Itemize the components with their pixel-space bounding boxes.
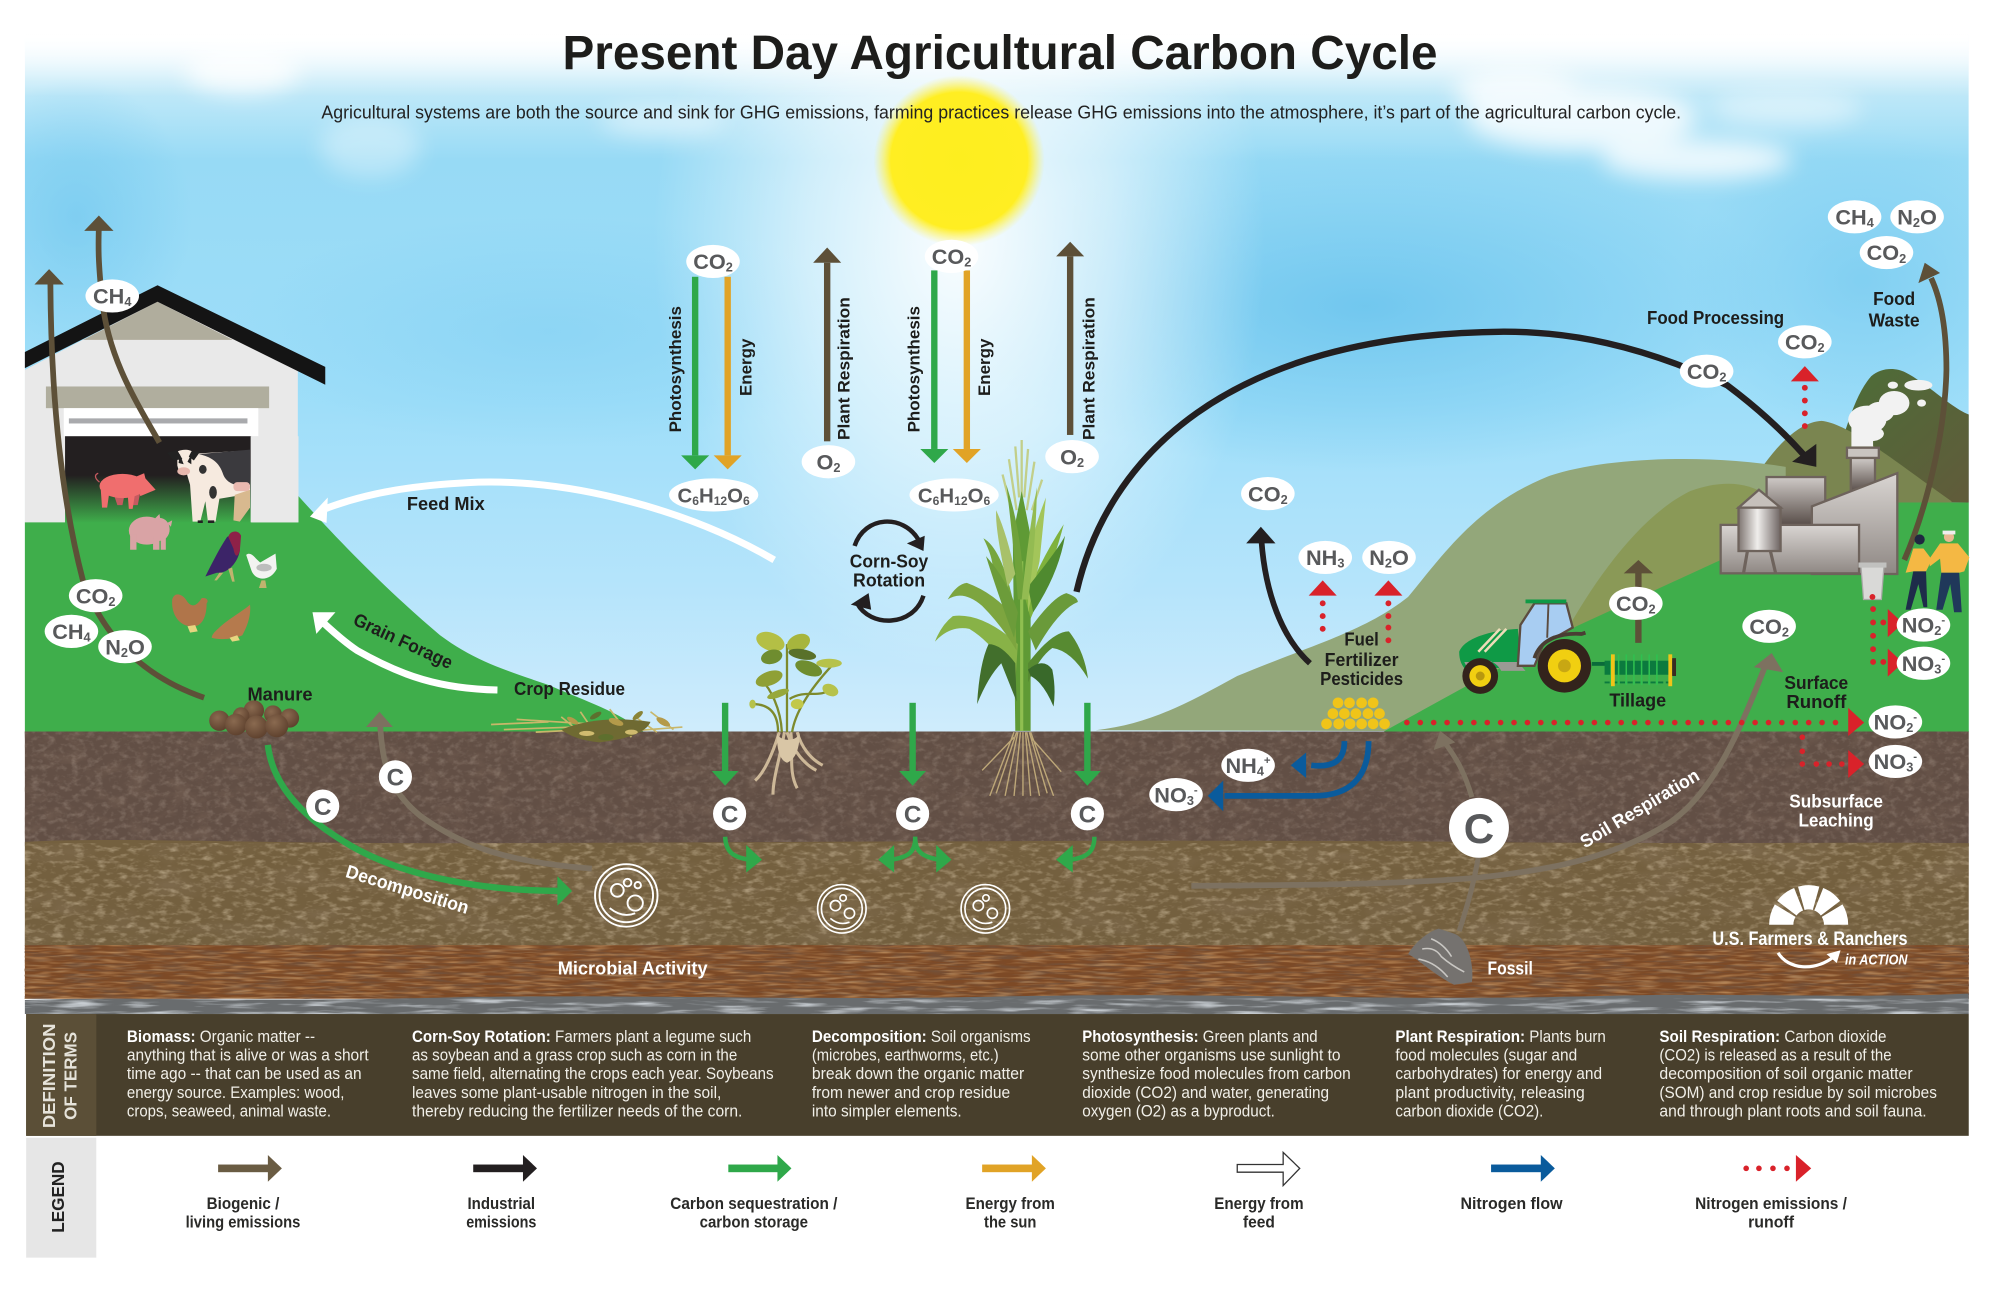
bubble: N2O waste: N: [1897, 204, 1913, 229]
bubble: O2 right: [1045, 440, 1099, 473]
bubble: NH4: +: [1264, 755, 1271, 767]
bubble: glucose left: H: [699, 486, 714, 508]
legend: industrial: [466, 1155, 537, 1232]
definition: photosynthesis: Photosynthesis: Green plants and: [1082, 1027, 1318, 1046]
icon: microbe large: [595, 864, 658, 927]
definition: soil respiration: (CO2) is released as a result of the: [1659, 1046, 1892, 1065]
arrow: nitrogen emissions N2O: [1374, 580, 1402, 643]
definition: photosynthesis: dioxide (CO2) and water, generating: [1082, 1083, 1329, 1102]
label: tillage: Tillage: [1609, 690, 1666, 711]
legend: carbon sequestration: [670, 1155, 838, 1232]
bubble: CO2 middle: 2: [964, 255, 971, 270]
bubble: O2 left: O: [816, 449, 833, 474]
label: food waste: [1869, 288, 1920, 331]
bubble: glucose left: 12: [714, 494, 727, 508]
arrows: small carbon curves: [725, 837, 1094, 872]
bubble: carbon manure: C: [314, 794, 331, 821]
definition: photosynthesis: synthesize food molecules from carbon: [1082, 1064, 1351, 1083]
hill: darkest back: [1824, 369, 1969, 503]
bubble: CO2 tillage: CO: [1616, 591, 1649, 616]
legend: nitrogen flow: Nitrogen flow: [1460, 1194, 1563, 1213]
label: subsurface leaching: Leaching: [1798, 810, 1874, 831]
panel: green field right: [1383, 503, 1969, 732]
heading block: OF TERMS: [61, 1032, 81, 1120]
definition: decomposition: [812, 1027, 1031, 1121]
bubble: NH4: [1221, 749, 1275, 782]
bubble: NO3 waste: NO: [1902, 651, 1934, 676]
definition: plant respiration: carbohydrates) for energy and: [1395, 1064, 1602, 1083]
arrows: photosynthesis and energy set one: Photosynthesis: [666, 306, 685, 432]
label: fuel fertilizer pesticides: Fuel: [1344, 628, 1379, 649]
bubble: glucose middle: O: [968, 486, 983, 508]
bubble: NO3 leaching: [1869, 745, 1922, 778]
icon: tiller: [1592, 654, 1676, 686]
bubble: NO3 leaching: NO: [1874, 749, 1906, 774]
label: food processing: Food Processing: [1647, 307, 1784, 328]
panel: right hills: [1096, 369, 1969, 732]
logo swoosh: [1778, 950, 1841, 967]
bubble: NO2 waste: [1897, 608, 1950, 642]
legend: industrial: Industrial: [467, 1194, 535, 1213]
bubble: CO2 fuel: 2: [1281, 492, 1288, 507]
icon: microbe middle: [818, 885, 866, 933]
bubble: carbon middle: [896, 797, 929, 830]
bubble: NO3 soil: -: [1194, 784, 1198, 796]
bubble: CO2 waste: [1860, 236, 1913, 269]
bubble: N2O manure: N: [105, 634, 121, 659]
logo wordmark: U.S. Farmers & Ranchers: [1712, 928, 1908, 950]
heading block: [26, 1014, 96, 1136]
definition: biomass: anything that is alive or was a short: [127, 1046, 369, 1065]
bubble: O2 left: 2: [833, 460, 840, 475]
bubble: O2 right: O: [1060, 444, 1077, 469]
definition: corn-soy rotation: same field, alternating the crops each year. Soybeans: [412, 1064, 774, 1083]
soil: topsoil: [25, 732, 1969, 846]
bubble: glucose left: 6: [692, 494, 699, 508]
door opening: [65, 436, 251, 523]
logo fan: [1781, 897, 1836, 925]
bubble: O2 left: [802, 445, 855, 478]
definition: decomposition: break down the organic matter: [812, 1064, 1025, 1083]
bubble: O2 right: 2: [1077, 455, 1084, 470]
bubble: CO2 fuel: [1241, 477, 1295, 510]
title: Present Day Agricultural Carbon Cycle: [563, 26, 1437, 80]
bubble: CO2 manure: CO: [76, 583, 108, 608]
icon: pink pig: [129, 514, 172, 550]
bubble: NO3 soil: [1149, 778, 1203, 811]
arrows: photosynthesis and energy set one: [666, 277, 755, 469]
panel: definition of terms: [26, 1014, 1969, 1136]
bubble: CH4 barn: [85, 279, 139, 312]
bubble: CO2 middle: [925, 240, 978, 273]
label: subsurface leaching: Subsurface: [1789, 790, 1883, 811]
label: feed mix: Feed Mix: [407, 493, 485, 514]
icon: trash can: [1858, 562, 1886, 600]
bubble: carbon large: C: [1464, 805, 1494, 852]
barn wall: [25, 301, 298, 523]
barn pillar: [251, 436, 298, 522]
legend: nitrogen flow: [1460, 1155, 1563, 1213]
bubble: CH4 barn: CH: [93, 284, 124, 309]
chimney: [1851, 458, 1875, 494]
panel: barn: [25, 285, 325, 523]
bubble: CO2 tillage: [1609, 587, 1663, 620]
bubble: glucose left: [669, 478, 758, 511]
definition: decomposition: (microbes, earthworms, etc.): [812, 1046, 999, 1065]
gable: [83, 302, 233, 340]
bubble: NO2 runoff: NO: [1874, 710, 1906, 735]
bubble: CO2 left: 2: [726, 260, 733, 275]
arrow: industrial arc to food processing: [1077, 332, 1816, 592]
bubble: glucose middle: 6: [933, 494, 940, 508]
bubble: glucose left: C: [677, 486, 692, 508]
bubble: CO2 processing: 2: [1818, 340, 1825, 355]
bubble: NO3 soil: 3: [1187, 793, 1194, 808]
bubble: CO2 waste: CO: [1867, 240, 1899, 265]
icon: brown hen one: [172, 594, 208, 633]
definition: corn-soy rotation: thereby reducing the fertilizer needs of the corn.: [412, 1102, 742, 1121]
definition: biomass: time ago -- that can be used as an: [127, 1064, 362, 1083]
icon: crop residue: [491, 709, 682, 742]
soil: subsoil: [25, 840, 1969, 946]
label: food waste: Food: [1873, 288, 1915, 309]
arrow: industrial from fuel: [1246, 527, 1310, 663]
bubble: NO3 leaching: 3: [1906, 760, 1913, 775]
arrow: feed mix: [310, 482, 774, 560]
bubble: NO3 soil: NO: [1154, 782, 1187, 807]
bubble: NO2 waste: NO: [1902, 613, 1934, 638]
bubble: CO2 tillage: 2: [1649, 602, 1656, 617]
arrow: grain forage: [313, 612, 497, 690]
definition: plant respiration: [1395, 1027, 1606, 1121]
bubble: N2O waste: O: [1920, 204, 1937, 229]
arrows: photosynthesis and energy set two: Energy: [975, 338, 994, 396]
bubble: carbon soy: C: [721, 802, 738, 829]
subtitle: Agricultural systems are both the source and sink for GHG emissions, farming practices release GHG emissions into the atmosphere, it’s part of the agricultural carbon cycle.: [321, 102, 1681, 123]
legend: industrial: emissions: [466, 1213, 536, 1232]
bubble: N2O fuel: O: [1392, 545, 1409, 570]
bubble: CO2 fuel: CO: [1248, 481, 1281, 506]
bubble: CO2 industrial: [1680, 355, 1733, 388]
definition: biomass: Biomass: Organic matter --: [127, 1027, 315, 1046]
legend: energy from feed: [1214, 1152, 1304, 1232]
bubble: NO2 runoff: [1869, 705, 1922, 739]
label: food waste: Waste: [1869, 310, 1920, 331]
icon: purple hen: [205, 532, 241, 582]
arrows: photosynthesis and energy set two: [905, 270, 994, 463]
bubble: CH4 manure: 4: [84, 630, 92, 645]
arrow: subsurface leaching dotted line: [1799, 734, 1864, 778]
bubble: NO2 waste: 2: [1934, 623, 1941, 638]
silo: [1739, 490, 1781, 573]
definition: plant respiration: food molecules (sugar and: [1395, 1046, 1577, 1065]
logo in action: in ACTION: [1845, 952, 1908, 968]
arrow: plant respiration two: Plant Respiration: [1079, 297, 1098, 440]
bubble: glucose middle: [909, 478, 999, 511]
legend heading: LEGEND: [48, 1161, 68, 1233]
label: corn-soy rotation: Corn-Soy: [850, 551, 929, 572]
definition: decomposition: from newer and crop residue: [812, 1083, 1010, 1102]
bubble: CO2 soil: [1742, 610, 1796, 643]
definition: corn-soy rotation: [412, 1027, 774, 1121]
definition: soil respiration: Soil Respiration: Carbon dioxide: [1659, 1027, 1886, 1046]
top white fade: [25, 39, 1968, 88]
roof: [25, 285, 325, 385]
bubble: N2O waste: [1890, 200, 1944, 233]
legend: energy from sun: Energy from: [966, 1194, 1055, 1213]
label: fuel fertilizer pesticides: Fertilizer: [1325, 649, 1399, 670]
arrow: nitrogen emissions factory: [1791, 366, 1819, 429]
label: corn-soy rotation: [850, 551, 929, 591]
bubble: carbon up: C: [387, 765, 404, 792]
panel: sky background: [0, 0, 2000, 732]
definition: biomass: crops, seaweed, animal waste.: [127, 1102, 331, 1121]
arrow: food waste emissions: [1904, 263, 1946, 560]
arrow: plant respiration one: Plant Respiration: [834, 297, 853, 440]
legend: energy from sun: [966, 1155, 1055, 1232]
legend: energy from sun: the sun: [984, 1213, 1036, 1232]
arrow: fossil carbon lines: [1434, 731, 1478, 931]
legend: energy from feed: Energy from: [1214, 1194, 1304, 1213]
arrows: photosynthesis and energy set one: Energy: [736, 338, 755, 396]
deep blue sky patches: [24, 101, 1969, 444]
legend: biogenic: living emissions: [186, 1213, 300, 1232]
bubble: CO2 industrial: 2: [1719, 369, 1726, 384]
bubble: NO3 waste: [1897, 647, 1950, 680]
definition: biomass: energy source. Examples: wood,: [127, 1083, 344, 1102]
icon: farmers and ranchers logo: [1712, 897, 1908, 968]
icon: factory smoke: [1848, 380, 1932, 446]
bubble: CH4 waste: CH: [1835, 204, 1867, 229]
legend heading: [26, 1138, 96, 1258]
main block: [1721, 525, 1859, 573]
bubble: glucose left: 6: [743, 494, 750, 508]
icon: microbe right: [961, 885, 1010, 933]
bubble: N2O fuel: 2: [1385, 556, 1392, 571]
upper block: [1767, 477, 1825, 528]
icon: cow: [167, 450, 250, 523]
bubble: NH3: 3: [1337, 556, 1344, 571]
definition: soil respiration: decomposition of soil organic matter: [1659, 1064, 1913, 1083]
bubble: NO3 leaching: -: [1913, 751, 1917, 763]
bubble: NO2 runoff: -: [1913, 712, 1917, 724]
bubbles: gas labels: [45, 200, 1950, 858]
label: soil respiration: Soil Respiration: [1576, 764, 1703, 852]
legend: nitrogen emissions: [1695, 1155, 1847, 1232]
bubble: CO2 manure: 2: [108, 594, 115, 609]
icon: tractor: [1459, 599, 1591, 694]
legend: biogenic: [186, 1155, 300, 1232]
sun glow: [676, 59, 1246, 626]
arrow: nitrogen emissions NH3: [1309, 580, 1337, 632]
arrow: biogenic emissions from manure: [34, 269, 204, 698]
icon: manure pile: [209, 700, 299, 739]
bubble: carbon manure: [306, 790, 339, 823]
saw-tooth wall: [1812, 473, 1897, 574]
bubble: CH4 waste: 4: [1867, 215, 1875, 230]
arrow: soil respiration: [1191, 653, 1783, 886]
bubble: glucose middle: C: [918, 486, 933, 508]
labels: scene text: [247, 288, 1920, 978]
bubble: carbon corn: [1071, 797, 1104, 830]
label: surface runoff: Runoff: [1786, 691, 1847, 712]
bubble: CH4 manure: [45, 615, 98, 648]
bubble: carbon up: [379, 760, 412, 793]
legend: nitrogen emissions: runoff: [1748, 1213, 1794, 1232]
bubble: CO2 waste: 2: [1899, 251, 1906, 266]
bubble: CO2 industrial: CO: [1687, 359, 1719, 384]
heading block: DEFINITION: [39, 1024, 59, 1128]
bubble: glucose middle: 12: [954, 494, 968, 508]
label: fossil: Fossil: [1488, 957, 1533, 978]
bubble: NH3: NH: [1306, 545, 1337, 570]
definition: photosynthesis: some other organisms use sunlight to: [1082, 1046, 1341, 1065]
definition: corn-soy rotation: Corn-Soy Rotation: Farmers plant a legume such: [412, 1027, 751, 1046]
definition: photosynthesis: oxygen (O2) as a byproduct.: [1082, 1102, 1275, 1121]
icon: fossil: [1408, 929, 1472, 985]
bubble: NO3 waste: -: [1941, 653, 1945, 665]
icon: corn plant: [935, 440, 1088, 796]
panel: legend: [26, 1138, 1847, 1258]
arrow: tillage emissions: [1624, 560, 1653, 643]
door lintel: [64, 408, 258, 436]
bubble: glucose left: O: [727, 486, 743, 508]
label: fuel fertilizer pesticides: Pesticides: [1320, 668, 1403, 689]
bubble: CO2 left: CO: [693, 249, 726, 274]
arrow: plant respiration one: [813, 247, 853, 441]
arrow: biogenic soil carbon up: [366, 712, 592, 869]
legend: energy from feed: feed: [1243, 1213, 1275, 1232]
panel: left green hill: [25, 496, 644, 732]
definition: soil respiration: and through plant roots and soil fauna.: [1659, 1102, 1927, 1121]
icon: corn-soy rotation arrows: [851, 522, 925, 621]
icon: fertilizer pellets: [1321, 697, 1390, 729]
panel: soil layers: [25, 732, 1969, 1014]
hill: darker olive: [1562, 484, 1786, 663]
bubble: NO2 waste: -: [1941, 615, 1945, 627]
bubble: CH4 barn: 4: [124, 294, 132, 309]
definition: decomposition: into simpler elements.: [812, 1102, 962, 1121]
icon: woman farmer: [1906, 534, 1931, 610]
definition: biomass: [127, 1027, 369, 1121]
bubble: glucose middle: H: [939, 486, 954, 508]
icon: white hen: [246, 554, 277, 588]
bubble: CH4 waste: [1828, 200, 1881, 233]
bubble: NH4: 4: [1257, 764, 1265, 779]
arrow: biogenic methane from barn: [84, 216, 159, 443]
definition: corn-soy rotation: as soybean and a grass crop such as corn in the: [412, 1046, 737, 1065]
bubble: CO2 manure: [69, 579, 122, 612]
arrow: surface runoff dotted line: [1404, 708, 1864, 736]
icon: man farmer: [1929, 531, 1969, 612]
definition: plant respiration: plant productivity, releasing: [1395, 1083, 1585, 1102]
sun: [874, 75, 1045, 246]
bubble: NO3 waste: 3: [1934, 661, 1941, 676]
label: subsurface leaching: [1789, 790, 1883, 831]
icon: red pig: [95, 473, 156, 509]
bubble: carbon corn: C: [1079, 802, 1096, 829]
bubble: NH3: [1298, 541, 1352, 574]
definition: plant respiration: carbon dioxide (CO2).: [1395, 1102, 1543, 1121]
bubble: carbon large: [1449, 798, 1509, 858]
bubble: CO2 processing: [1778, 325, 1832, 358]
bubble: CO2 left: [686, 245, 740, 278]
bubble: CO2 processing: CO: [1785, 329, 1818, 354]
bubble: N2O waste: 2: [1913, 215, 1920, 230]
icon: factory: [1721, 448, 1897, 574]
label: crop residue: Crop Residue: [514, 678, 625, 699]
bubble: CO2 soil: 2: [1782, 624, 1789, 639]
lintel rail: [69, 418, 247, 423]
arrow: food waste nitrogen dots: [1870, 606, 1903, 677]
chimney cap: [1847, 448, 1879, 458]
bubble: N2O fuel: [1362, 541, 1416, 574]
arrows: nitrogen flow: [1208, 741, 1369, 811]
soil: bedrock: [25, 994, 1969, 1014]
icon: soybean plant: [749, 628, 842, 795]
arrows: photosynthesis and energy set two: Photosynthesis: [905, 306, 924, 432]
bubble: carbon middle: C: [904, 802, 921, 829]
clouds: [185, 47, 1862, 180]
bubble: NH4: NH: [1226, 753, 1257, 778]
label: grain forage: Grain Forage: [350, 609, 456, 673]
definition: soil respiration: (SOM) and crop residue by soil microbes: [1659, 1083, 1937, 1102]
bubble: N2O manure: [98, 630, 152, 663]
bubble: CO2 soil: CO: [1749, 614, 1782, 639]
definition: decomposition: Decomposition: Soil organisms: [812, 1027, 1031, 1046]
legend: carbon sequestration: carbon storage: [700, 1213, 808, 1232]
label: manure: Manure: [247, 683, 313, 704]
label: microbial activity: Microbial Activity: [558, 957, 708, 978]
definition: corn-soy rotation: leaves some plant-usable nitrogen in the soil,: [412, 1083, 721, 1102]
legend: nitrogen emissions: Nitrogen emissions /: [1695, 1194, 1847, 1213]
definition: soil respiration: [1659, 1027, 1937, 1121]
bubble: N2O manure: O: [128, 634, 145, 659]
bubble: glucose middle: 6: [983, 494, 990, 508]
label: surface runoff: Surface: [1784, 672, 1848, 693]
label: fuel fertilizer pesticides: [1320, 628, 1403, 689]
bubble: carbon soy: [713, 797, 746, 830]
band: [46, 386, 269, 408]
label: corn-soy rotation: Rotation: [853, 570, 925, 591]
definition: plant respiration: Plant Respiration: Plants burn: [1395, 1027, 1606, 1046]
definition: photosynthesis: [1082, 1027, 1351, 1121]
label: decomposition: Decomposition: [343, 861, 472, 918]
bubble: CO2 middle: CO: [932, 244, 964, 269]
arrow: plant respiration two: [1056, 242, 1098, 440]
soil: clay layer: [25, 945, 1969, 999]
hill: light olive: [1096, 459, 1786, 732]
legend: carbon sequestration: Carbon sequestration /: [670, 1194, 838, 1213]
bubble: N2O manure: 2: [121, 645, 128, 660]
bubble: NO2 runoff: 2: [1906, 720, 1913, 735]
icon: brown hen two: [212, 605, 250, 642]
arrow: carbon sequestration decomposition: [268, 745, 572, 906]
legend: biogenic: Biogenic /: [207, 1194, 280, 1213]
bubble: CH4 manure: CH: [52, 619, 84, 644]
hill: mid olive back: [1709, 421, 1952, 561]
bubble: N2O fuel: N: [1369, 545, 1385, 570]
arrows: carbon storage from plants: [712, 703, 1101, 786]
label: surface runoff: [1784, 672, 1848, 712]
panel background: [26, 1014, 1969, 1136]
